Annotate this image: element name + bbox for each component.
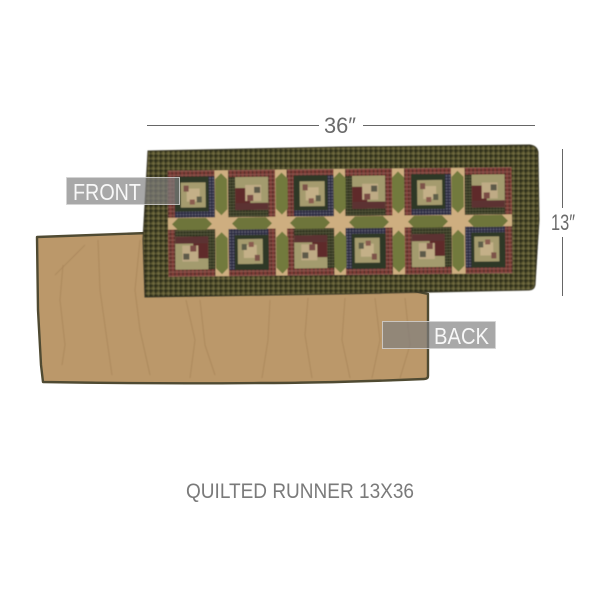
patchwork blocks bbox=[167, 167, 513, 277]
block row 2 bbox=[168, 226, 513, 277]
dimension: height 13 inches: 13″ bbox=[551, 210, 575, 235]
sashing background bbox=[167, 167, 513, 277]
green leaves vertical bbox=[215, 171, 465, 274]
label: FRONT: FRONT bbox=[73, 179, 141, 205]
block row 1 bbox=[167, 167, 512, 218]
green leaves horizontal bbox=[172, 215, 508, 230]
panel: back of runner bbox=[37, 233, 428, 383]
dimension: width 36 inches: 36″ bbox=[324, 113, 356, 138]
back fabric with binding bbox=[37, 233, 428, 383]
panel: front of runner bbox=[143, 145, 539, 297]
plaid border bbox=[143, 145, 539, 297]
label: BACK: BACK bbox=[434, 323, 489, 349]
label: FRONT bbox=[66, 178, 180, 205]
label: BACK bbox=[382, 322, 496, 349]
caption: QUILTED RUNNER 13X36 bbox=[186, 480, 414, 503]
back fabric wrinkles bbox=[55, 240, 410, 378]
